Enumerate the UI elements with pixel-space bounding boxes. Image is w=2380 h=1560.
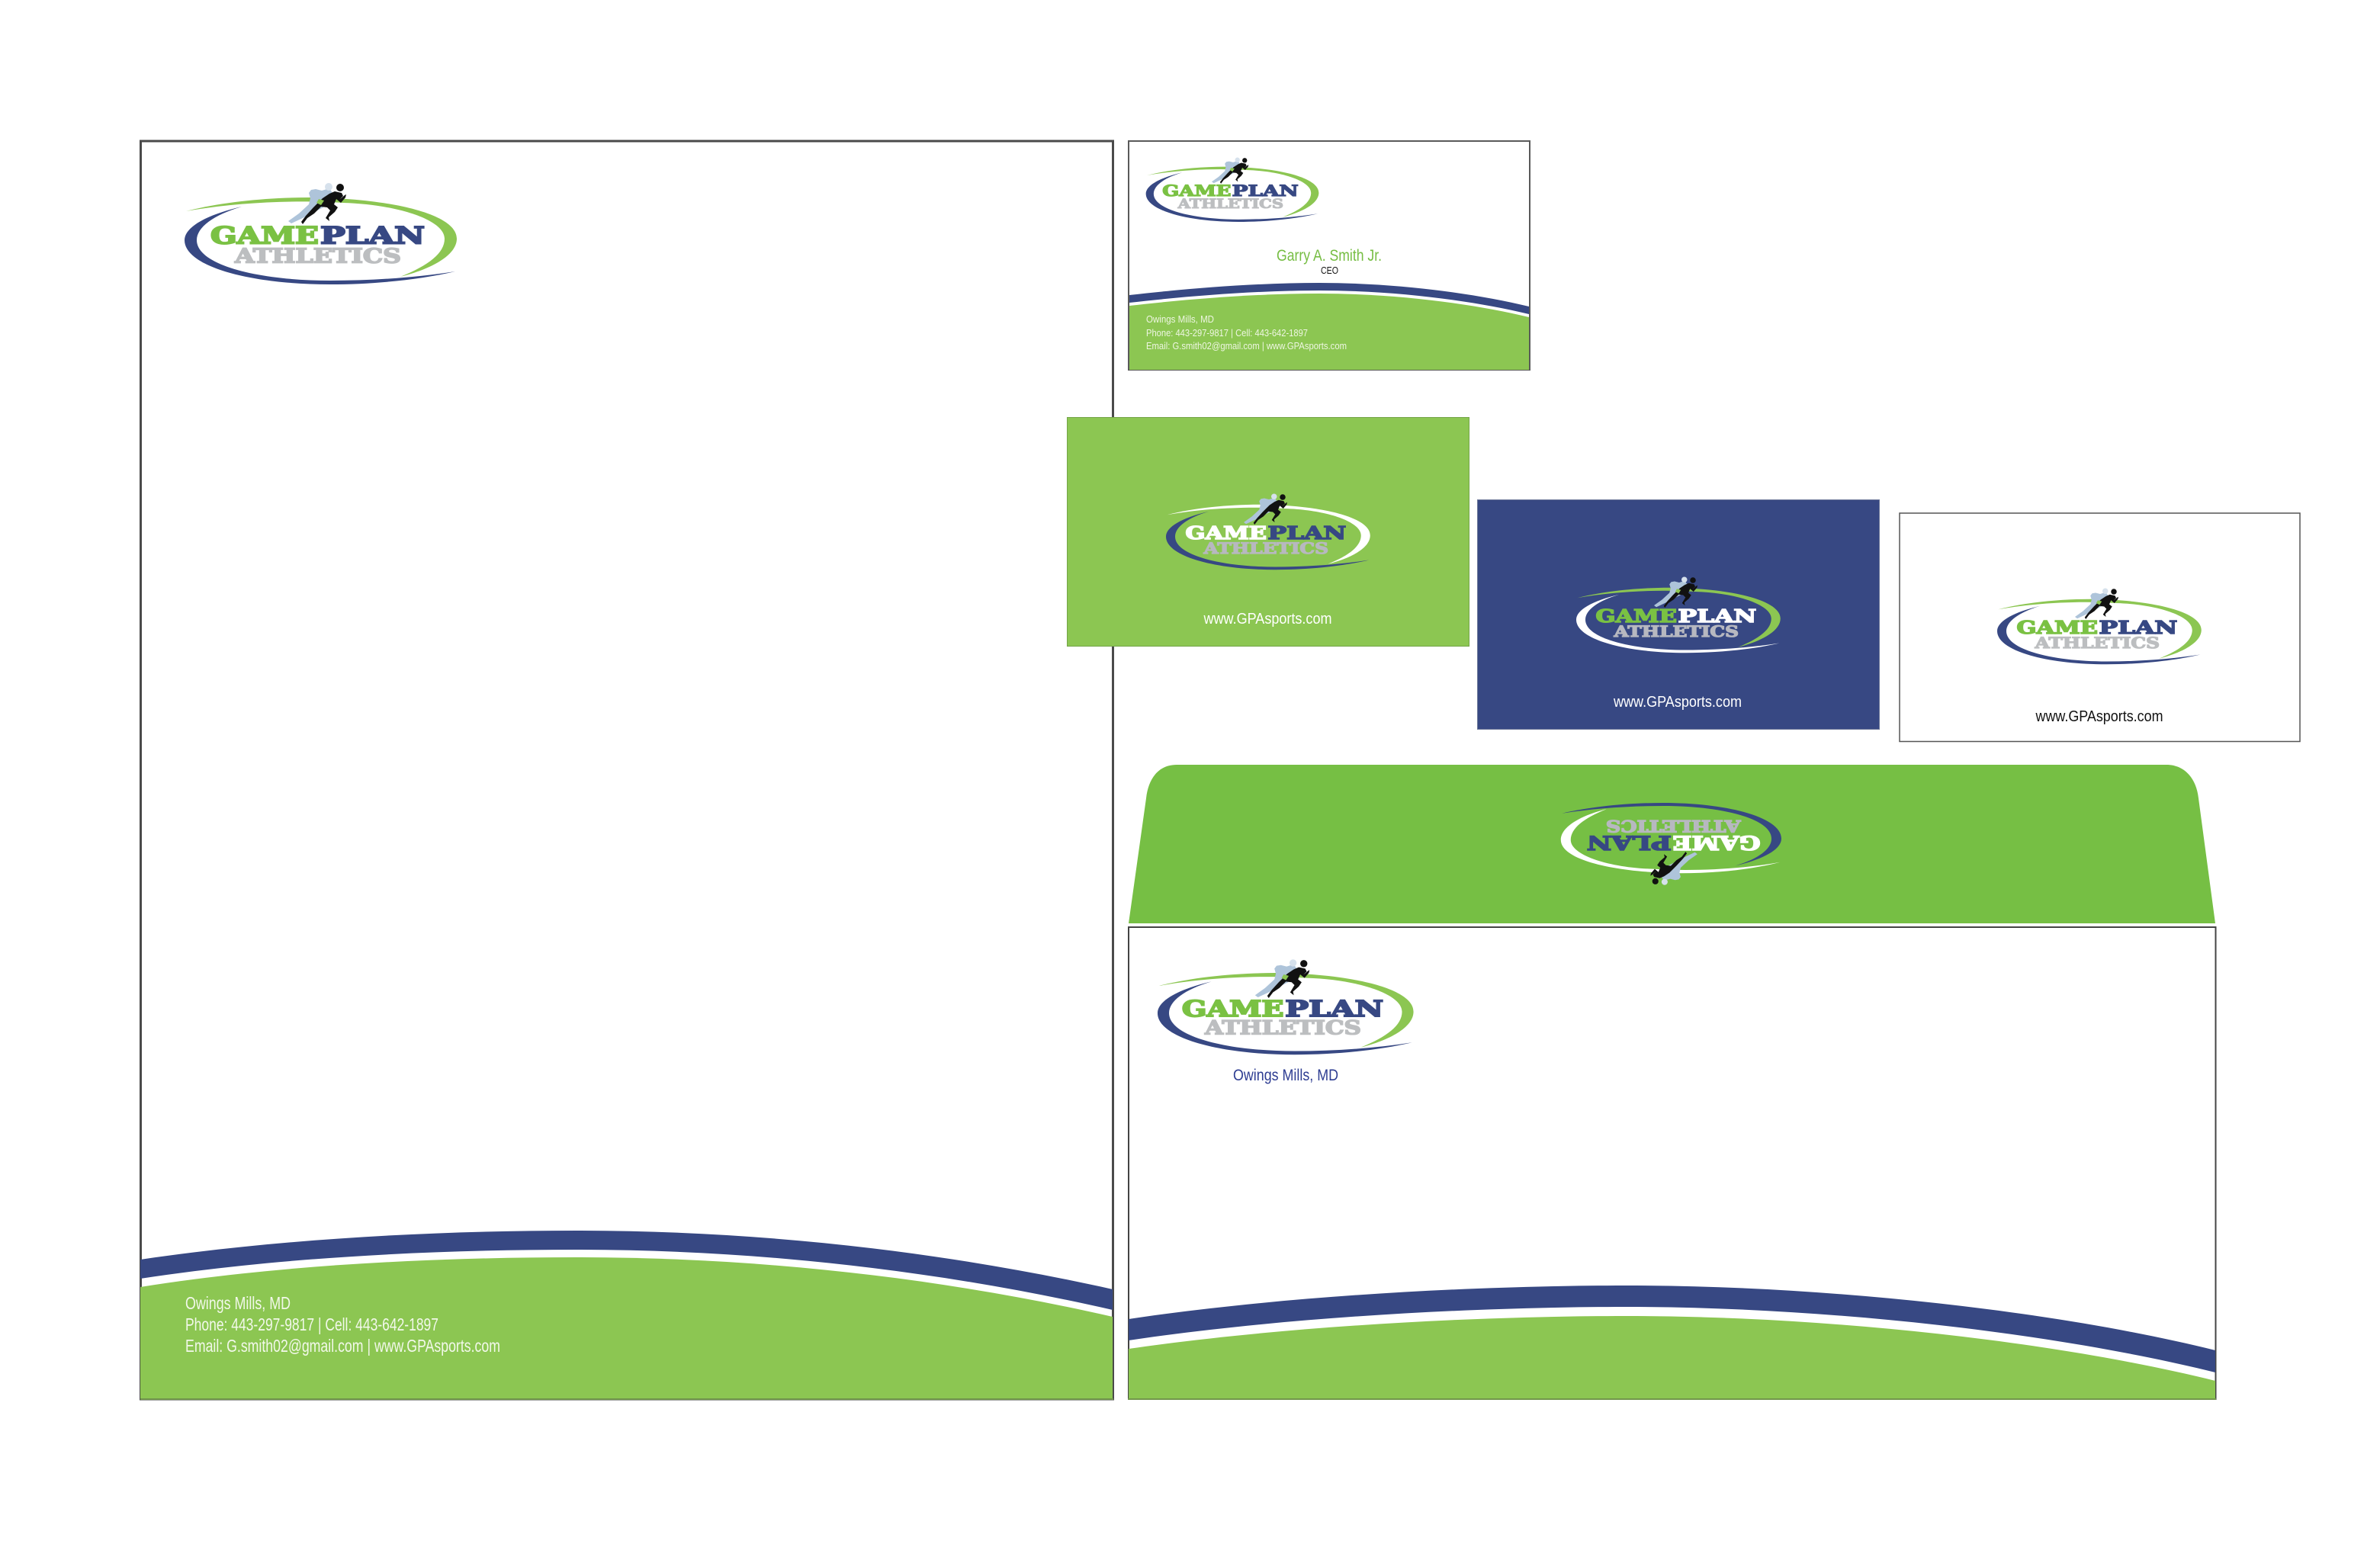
logo: green card: ATHLETICS — [1203, 539, 1328, 557]
envelope sheet — [1129, 927, 2216, 1399]
logo: green card — [1166, 494, 1370, 570]
logo: white card: PLAN — [2099, 618, 2177, 638]
logo: letterhead — [185, 183, 457, 284]
card contact text: Phone: 443-297-9817 | Cell: 443-642-1897 — [1146, 327, 1308, 339]
logo: business card — [1146, 158, 1318, 222]
envelope bottom edge — [1128, 1398, 2216, 1400]
flap shape — [1129, 765, 2215, 923]
green card website: www.GPAsports.com — [1203, 611, 1331, 628]
panel: white business card back — [1900, 513, 2300, 741]
logo: green card: GAME — [1185, 523, 1267, 544]
logo: blue card — [1576, 576, 1781, 653]
letterhead blue swoosh band — [140, 1231, 1113, 1310]
logo: blue card: ATHLETICS — [1613, 622, 1739, 640]
logo: flap, upside down: GAME — [1672, 831, 1760, 854]
panel: blue business card back — [1478, 500, 1879, 729]
letterhead green footer curve — [140, 1257, 1113, 1399]
logo: letterhead: ATHLETICS — [234, 244, 401, 268]
card green footer curve — [1129, 294, 1529, 370]
logo: flap, upside down: PLAN — [1587, 831, 1672, 854]
card holder name: Garry A. Smith Jr. — [1277, 247, 1382, 265]
logo: envelope: PLAN — [1285, 996, 1383, 1022]
logo: white card: ATHLETICS — [2034, 634, 2160, 652]
letterhead sheet — [140, 141, 1113, 1399]
panel: business card front — [1129, 141, 1530, 370]
blue card sheet — [1478, 500, 1879, 729]
letterhead contact text: Email: G.smith02@gmail.com | www.GPAsports.com — [185, 1336, 500, 1356]
letterhead contact text: Phone: 443-297-9817 | Cell: 443-642-1897 — [185, 1314, 438, 1334]
logo: business card: GAME — [1162, 182, 1231, 200]
card contact text: Owings Mills, MD — [1146, 313, 1214, 325]
letterhead bottom edge — [140, 1398, 1113, 1400]
logo: flap, upside down — [1561, 803, 1781, 885]
logo: green card: PLAN — [1267, 523, 1346, 544]
logo: flap, upside down: ATHLETICS — [1606, 816, 1742, 835]
logo: envelope: GAME — [1182, 996, 1283, 1022]
logo: white card: GAME — [2016, 618, 2098, 638]
card contact text — [1146, 313, 1347, 351]
logo: business card: PLAN — [1232, 182, 1299, 200]
letterhead contact text: Owings Mills, MD — [185, 1293, 291, 1313]
card blue swoosh band — [1129, 283, 1529, 314]
card holder title: CEO — [1321, 265, 1338, 276]
green card sheet — [1068, 418, 1469, 647]
envelope return address: Owings Mills, MD — [1233, 1067, 1338, 1084]
letterhead contact text — [185, 1293, 500, 1356]
panel: envelope flap — [1129, 765, 2215, 923]
blue card website: www.GPAsports.com — [1613, 694, 1742, 711]
logo: business card: ATHLETICS — [1177, 196, 1283, 211]
logo: white card — [1997, 589, 2202, 664]
logo: blue card: GAME — [1595, 606, 1677, 627]
envelope blue swoosh band — [1129, 1286, 2215, 1372]
logo: envelope — [1158, 959, 1414, 1054]
white card sheet — [1900, 513, 2300, 741]
logo: letterhead: GAME — [210, 223, 319, 250]
panel: green business card back — [1068, 418, 1469, 647]
logo: envelope: ATHLETICS — [1204, 1016, 1361, 1038]
logo: letterhead: PLAN — [320, 223, 425, 250]
panel: letterhead — [140, 141, 1113, 1400]
logo: blue card: PLAN — [1678, 606, 1756, 627]
envelope green footer curve — [1129, 1316, 2215, 1399]
card sheet — [1129, 141, 1530, 370]
card contact text: Email: G.smith02@gmail.com | www.GPAsports.com — [1146, 340, 1347, 351]
panel: envelope body — [1128, 927, 2216, 1400]
white card website: www.GPAsports.com — [2035, 708, 2163, 725]
